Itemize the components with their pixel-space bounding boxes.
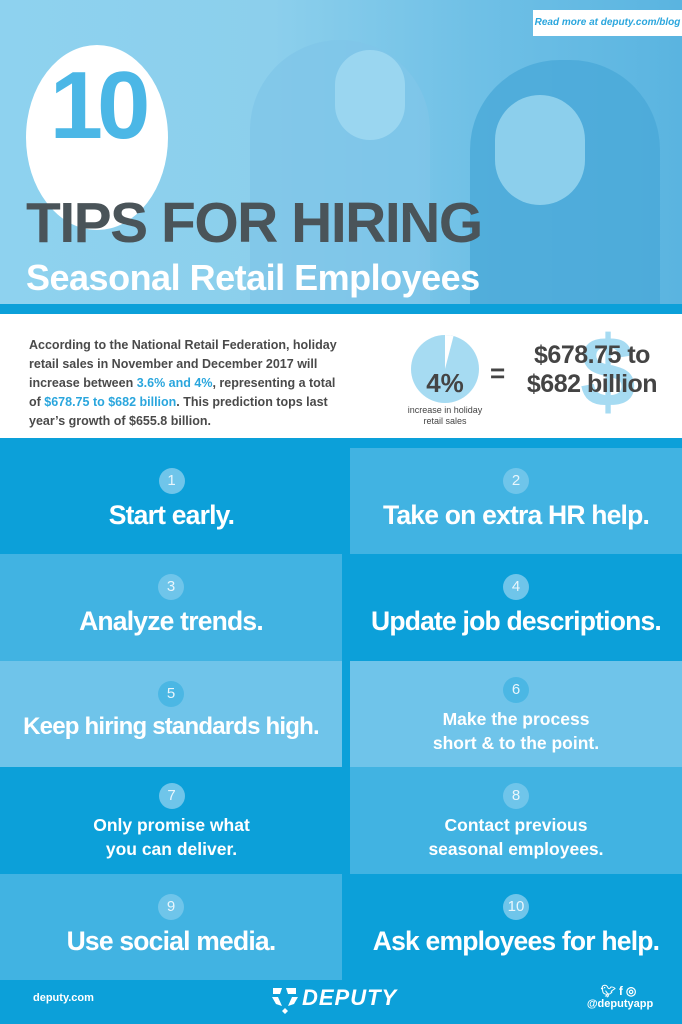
footer [33,984,653,1014]
tip 2: 2 [512,472,520,489]
tip 10: 10 [508,898,524,915]
tip 9: 9 [167,898,175,915]
tip 1: 1 [167,472,176,489]
equals value: $678.75 to [534,341,650,369]
tip 4: 4 [512,578,520,595]
social icons: @deputyapp [587,998,653,1010]
tip 1: Start early. [109,500,234,530]
tip 3: 3 [167,578,175,595]
tip 8 [350,767,682,874]
tip 2 [350,448,682,554]
equals value [490,316,657,428]
social icons: 🐦︎f◎ [601,984,639,998]
tip 6: Make the process [443,709,589,729]
tip 5 [0,661,342,767]
link badge [533,10,682,36]
equals value: $ [580,316,636,428]
tip 7: Only promise what [93,815,250,835]
tip 2: Take on extra HR help. [383,500,649,530]
tip 6: 6 [512,681,520,698]
title: TIPS FOR HIRING [26,191,482,255]
tip 9 [0,874,342,980]
tip 9: Use social media. [67,926,275,956]
intro panel [0,314,682,438]
tip 7 [93,783,250,859]
tip 3: Analyze trends. [79,606,263,636]
tip 7: you can deliver. [106,839,237,859]
tip 8: 8 [512,787,520,804]
tip 10: Ask employees for help. [373,926,659,956]
equals value: $682 billion [527,370,657,398]
pie chart 4%: 4% [426,368,464,398]
big 10 circle: 10 [50,52,144,159]
deputy logo: DEPUTY [302,985,397,1010]
tip 6: short & to the point. [433,733,599,753]
big 10 circle [26,45,168,230]
title [26,191,482,298]
tip 7: 7 [167,787,176,804]
tip 1 [109,468,234,530]
tip 8: seasonal employees. [428,839,604,859]
equals value: = [490,358,505,388]
deputy logo [272,985,398,1014]
tip 8: Contact previous [445,815,587,835]
footer: deputy.com [33,992,94,1004]
tip 3 [0,554,342,661]
intro text: According to the National Retail Federation, holiday retail sales in November and December 2017 will increase between 3.6% and 4%, representing a total of $678.75 to $682 billion. This prediction tops last year’s growth of $655.8 billion. [29,338,337,428]
pie chart 4%: increase in holiday retail sales [408,405,482,426]
tip 4 [371,574,661,636]
link badge: Read more at deputy.com/blog [535,17,680,28]
tip 4: Update job descriptions. [371,606,661,636]
pie chart 4% [408,335,482,426]
hero photo background [0,0,682,304]
title: Seasonal Retail Employees [26,257,480,298]
tip 6 [350,661,682,767]
social icons [587,984,653,1010]
tip 10 [373,894,659,956]
tip 5: 5 [167,685,175,702]
tip 5: Keep hiring standards high. [23,713,319,740]
